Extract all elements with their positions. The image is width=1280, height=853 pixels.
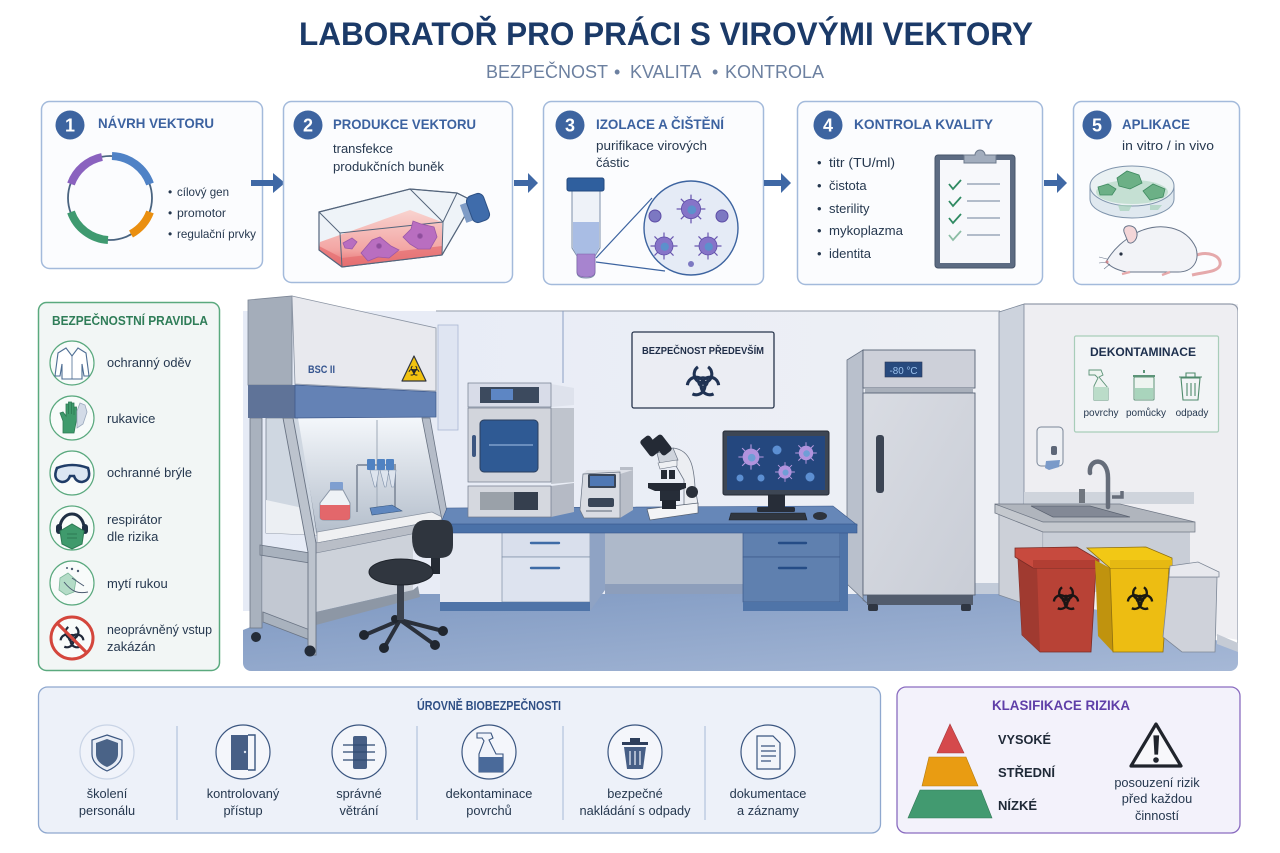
item: controlled access: přístup (223, 803, 263, 818)
rule: hand washing (50, 561, 168, 605)
subtitle: KVALITA (630, 62, 701, 82)
subtitle: • (712, 62, 718, 82)
panel: step 2 vector production (284, 102, 512, 282)
rule: goggles: ochranné brýle (107, 465, 192, 480)
tube rack with columns (357, 459, 402, 515)
panel: step 1 vector design (42, 102, 262, 268)
risk pyramid (908, 724, 992, 818)
cabinet frame lower (263, 555, 310, 632)
label BSC II: BSC II (308, 364, 335, 376)
soap dispenser (1037, 427, 1063, 470)
description: step 3: purifikace virových (596, 138, 707, 153)
icon: clipboard checklist (935, 150, 1015, 268)
heading: biosafety levels: ÚROVNĚ BIOBEZPEČNOSTI (417, 698, 561, 713)
laboratory bench (440, 506, 857, 611)
item: proper ventilation (332, 725, 386, 818)
number badge 2: 2 (303, 116, 313, 136)
ultra-low freezer (847, 350, 975, 611)
waste bin: yellow biohazard (1087, 547, 1172, 652)
wall poster: decontamination (1074, 336, 1218, 432)
description: step 2: transfekce (333, 141, 393, 156)
front post (283, 418, 316, 655)
item: safe waste handling: nakládání s odpady (580, 803, 691, 818)
risk assessment note: posouzení rizik (1114, 775, 1200, 790)
list: vector elements: regulační prvky (177, 227, 256, 241)
rule: respirator: dle rizika (107, 529, 159, 544)
icon: laboratory mouse (1099, 226, 1220, 275)
number badge 5 (1082, 110, 1112, 140)
item: controlled access (207, 725, 280, 818)
list: QC tests: • (817, 246, 822, 261)
risk assessment note (1114, 775, 1200, 823)
list: QC tests: • (817, 178, 822, 193)
item: documentation and records: dokumentace (730, 786, 806, 801)
icon: cell culture flask (319, 189, 491, 267)
panel: biosafety levels (38, 687, 880, 833)
subtitle: • (614, 62, 620, 82)
item: surface decontamination: dekontaminace (446, 786, 532, 801)
rule: respirator: respirátor (107, 512, 163, 527)
rule: no unauthorized entry (51, 617, 212, 659)
freezer temperature readout: -80 °C (890, 365, 918, 377)
flask cap (458, 192, 491, 227)
rule: goggles (50, 451, 192, 495)
heading: step 2: PRODUKCE VEKTORU (333, 116, 476, 132)
risk assessment note: činností (1135, 808, 1179, 823)
list: vector elements (168, 185, 256, 241)
rule: no unauthorized entry: neoprávněný vstup (107, 622, 212, 637)
list: QC tests: sterility (829, 201, 870, 216)
heading: safety rules: BEZPEČNOSTNÍ PRAVIDLA (52, 313, 208, 328)
callout: magnified viral particles (596, 181, 738, 275)
icon: jar (1133, 370, 1155, 400)
list: QC tests: čistota (829, 178, 867, 193)
cell blobs (343, 221, 437, 261)
list: QC tests: mykoplazma (829, 223, 904, 238)
rule: no unauthorized entry: zakázán (107, 639, 155, 654)
subtitle: BEZPEČNOST (486, 61, 608, 82)
list: QC tests: • (817, 155, 822, 170)
heading: step 3: IZOLACE A ČIŠTĚNÍ (596, 115, 725, 132)
item: staff training: školení (87, 786, 128, 801)
icon: bin (1179, 373, 1202, 400)
rule: hand washing: mytí rukou (107, 576, 168, 591)
centrifuge (580, 467, 633, 518)
panel: risk classification (897, 687, 1240, 833)
risk level labels: STŘEDNÍ (998, 765, 1055, 780)
risk level labels (998, 732, 1055, 813)
item: safe waste handling: bezpečné (607, 786, 663, 801)
number badge 3: 3 (565, 116, 575, 136)
item: documentation and records: a záznamy (737, 803, 800, 818)
arrow: step 1 to 2 (251, 173, 285, 193)
list: vector elements: • (168, 206, 172, 220)
panel: safety rules (38, 302, 220, 670)
sink (995, 462, 1195, 610)
icon: purification column (567, 178, 604, 278)
heading: risk classification: KLASIFIKACE RIZIKA (992, 698, 1130, 713)
number badge 2 (294, 110, 322, 140)
list: QC tests (817, 155, 904, 261)
cabinet chamber (298, 418, 444, 532)
description: step 3 (596, 138, 707, 170)
rule: protective clothing: ochranný oděv (107, 355, 191, 370)
arrow: step 2 to 3 (514, 173, 538, 193)
heading: step 4: KONTROLA KVALITY (854, 116, 994, 132)
list: QC tests: identita (829, 246, 872, 261)
list: QC tests: • (817, 201, 822, 216)
heading: step 5: APLIKACE (1122, 116, 1190, 132)
wall and floor background (243, 304, 1238, 671)
list: vector elements: • (168, 185, 172, 199)
description: step 2: produkčních buněk (333, 159, 444, 174)
incubators (468, 383, 574, 517)
panel: step 3 isolation and purification (544, 102, 764, 284)
waste bin: white general (1163, 562, 1219, 652)
cabinet hood (248, 296, 292, 385)
risk level labels: NÍZKÉ (998, 798, 1037, 813)
heading: step 1: NÁVRH VEKTORU (98, 115, 214, 131)
risk level labels: VYSOKÉ (998, 732, 1051, 747)
list: vector elements: cílový gen (177, 185, 229, 199)
arrow: step 4 to 5 (1044, 173, 1067, 193)
icon: spray bottle (1089, 370, 1108, 400)
subtitle: KONTROLA (725, 62, 824, 82)
description: step 2 (333, 141, 444, 174)
poster labels: odpady (1176, 408, 1208, 419)
item: documentation and records (730, 725, 806, 818)
item: proper ventilation: správné (336, 786, 382, 801)
description: step 5: in vitro / in vivo (1122, 138, 1214, 153)
item: proper ventilation: větrání (339, 803, 379, 818)
rule: gloves: rukavice (107, 411, 155, 426)
icon: warning triangle (1131, 724, 1181, 766)
computer monitor and keyboard (723, 431, 829, 520)
wall poster: decontamination: DEKONTAMINACE (1090, 345, 1196, 359)
rule: protective clothing (50, 341, 191, 385)
number badge 4: 4 (823, 116, 833, 136)
icon: plasmid map (68, 156, 152, 240)
list: vector elements: promotor (177, 206, 226, 220)
item: surface decontamination: povrchů (466, 803, 512, 818)
wall sign: safety first: BEZPEČNOST PŘEDEVŠÍM (642, 344, 764, 357)
wall sign: safety first (632, 332, 774, 408)
number badge 1: 1 (65, 116, 75, 136)
poster labels (1083, 407, 1208, 419)
icon: biohazard warning (402, 356, 426, 381)
arrow: step 3 to 4 (764, 173, 791, 193)
rule: gloves (50, 396, 155, 440)
lab chair (359, 520, 453, 653)
microscope (639, 433, 698, 520)
number badge 4 (814, 110, 842, 140)
item: controlled access: kontrolovaný (207, 786, 280, 801)
rule: respirator (50, 506, 163, 550)
list: QC tests: • (817, 223, 822, 238)
panel: laboratory scene (243, 296, 1238, 671)
panel: step 4 quality control (798, 102, 1042, 284)
number badge 5: 5 (1092, 116, 1102, 136)
icon: petri dish (1090, 166, 1174, 218)
item: staff training (79, 725, 135, 818)
risk assessment note: před každou (1122, 791, 1192, 806)
list: QC tests: titr (TU/ml) (829, 155, 895, 170)
poster labels: pomůcky (1126, 407, 1166, 419)
number badge 1 (56, 110, 84, 140)
biosafety cabinet (248, 296, 448, 656)
description: step 3: částic (596, 155, 630, 170)
item: safe waste handling (580, 725, 691, 818)
panel: step 5 application (1074, 102, 1240, 284)
poster labels: povrchy (1083, 408, 1119, 419)
title: LABORATOŘ PRO PRÁCI S VIROVÝMI VEKTORY (299, 16, 1033, 52)
waste bin: red biohazard (1015, 547, 1099, 652)
item: staff training: personálu (79, 803, 135, 818)
media bottle (320, 482, 350, 520)
number badge 3 (556, 110, 584, 140)
list: vector elements: • (168, 227, 172, 241)
item: surface decontamination (446, 725, 532, 818)
